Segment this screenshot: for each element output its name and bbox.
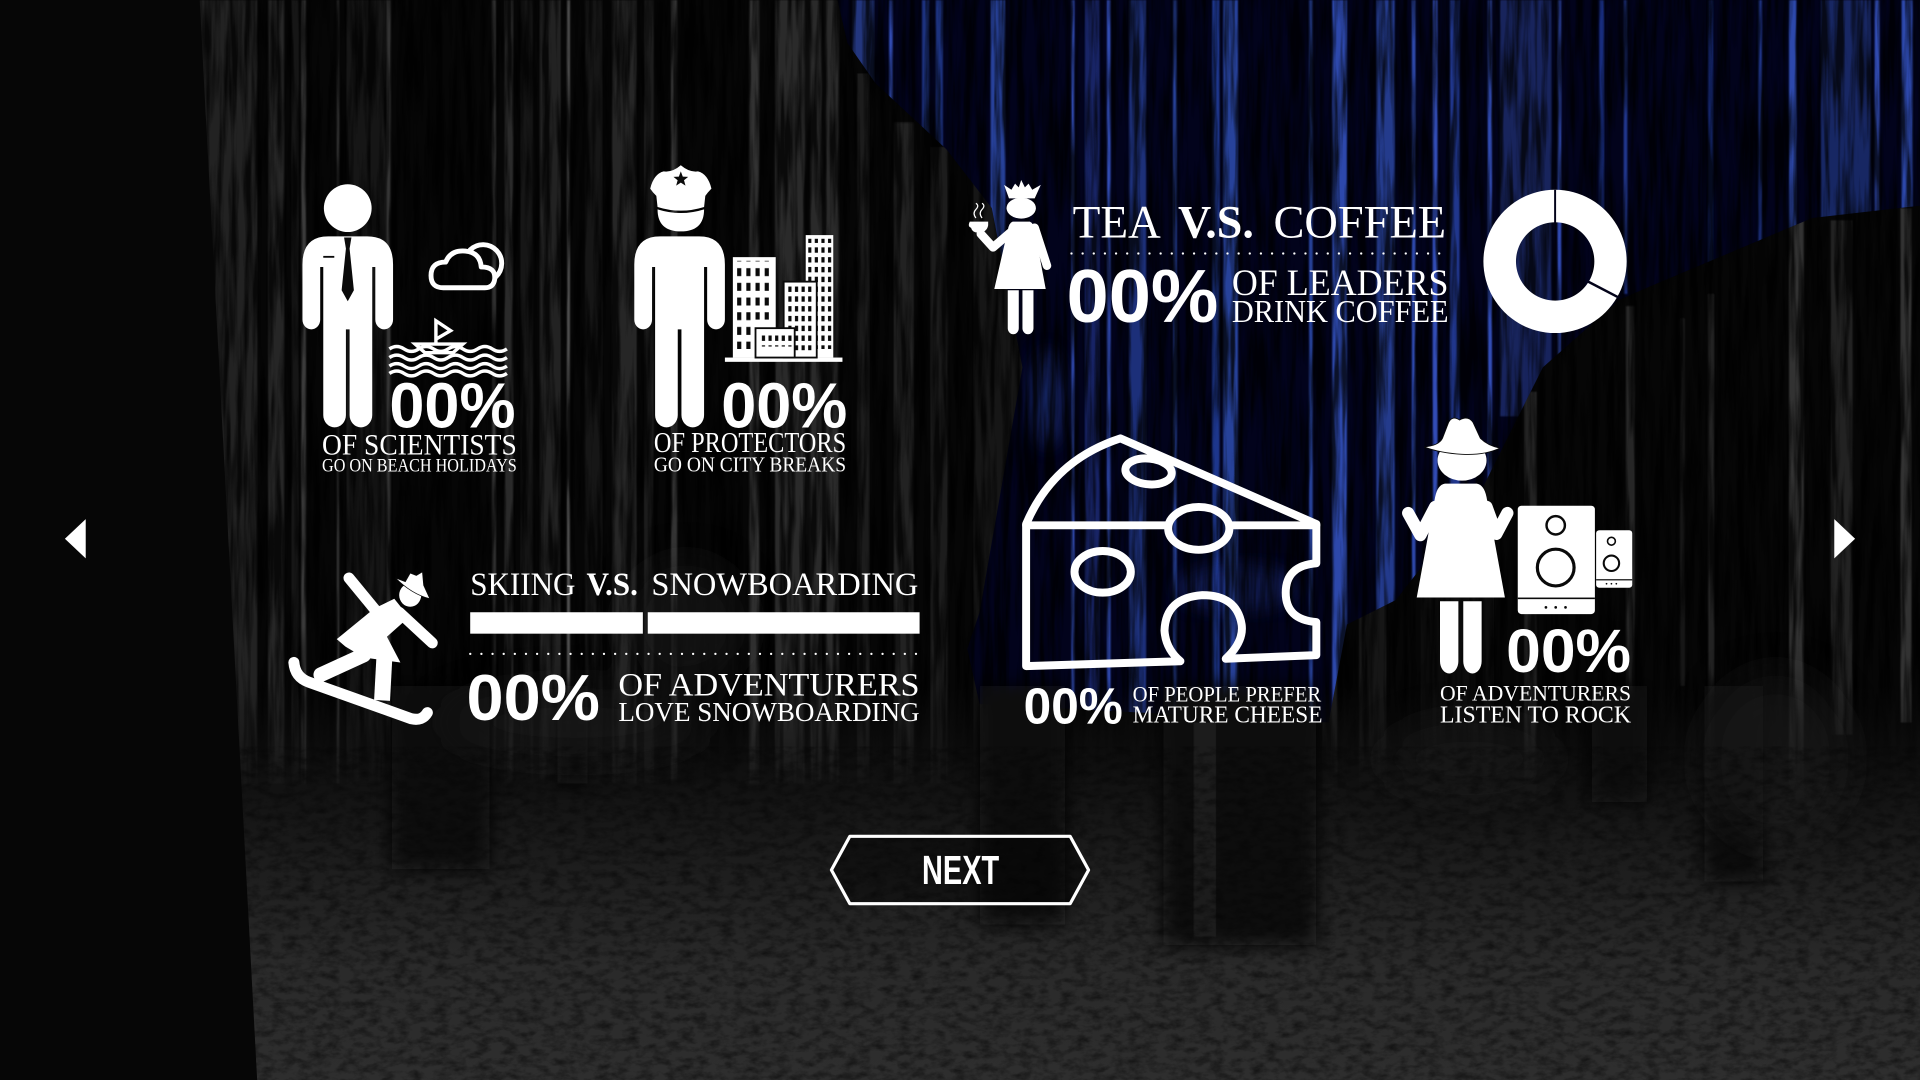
text: go on beach holidays: GO ON BEACH HOLIDAYS	[322, 455, 517, 476]
icon: speakers	[1518, 506, 1632, 614]
stat: 00% adventurers snowboarding: 00%	[467, 661, 600, 734]
donut chart	[1483, 190, 1627, 333]
text: of scientists: OF SCIENTISTS	[322, 429, 517, 461]
icon: city buildings	[725, 235, 842, 362]
text: drink coffee: DRINK COFFEE	[1232, 294, 1449, 329]
right arrow	[1834, 519, 1855, 558]
text: of people prefer: OF PEOPLE PREFER	[1133, 682, 1322, 707]
stat: 00% cheese: 00%	[1024, 677, 1123, 735]
heading: tea v.s. coffee: COFFEE	[1273, 198, 1446, 249]
icon: queen with tea cup	[969, 180, 1047, 334]
next button	[831, 836, 1089, 904]
stat: 00% scientists: 00%	[389, 370, 516, 441]
heading: skiing v.s. snowboarding: SKIING	[470, 567, 576, 603]
heading: tea v.s. coffee	[1073, 198, 1446, 249]
panel: scientists beach holidays	[302, 184, 517, 476]
icon: cheese wedge	[1026, 438, 1316, 666]
stat: 00% leaders: 00%	[1067, 254, 1218, 338]
text: of leaders: OF LEADERS	[1232, 262, 1449, 303]
icon: police officer figure	[634, 165, 725, 427]
next button: NEXT	[922, 847, 999, 893]
panel: mature cheese	[1024, 438, 1322, 735]
dotted rule	[470, 653, 920, 655]
icon: cloud and sun	[431, 245, 502, 288]
panel: tea vs coffee	[969, 180, 1627, 338]
bar chart: skiing vs snowboarding	[470, 612, 920, 634]
heading: tea v.s. coffee: TEA	[1073, 198, 1161, 249]
text: of protectors: OF PROTECTORS	[654, 428, 846, 459]
icon: snowboarder	[294, 572, 432, 719]
stat: 00% adventurers rock: 00%	[1506, 617, 1631, 685]
icon: boat on waves	[389, 321, 507, 376]
floor	[0, 686, 1920, 1080]
text: listen to rock: LISTEN TO ROCK	[1440, 701, 1631, 728]
heading: skiing v.s. snowboarding: SNOWBOARDING	[651, 567, 918, 603]
icon: scientist figure	[302, 184, 393, 427]
blue area	[840, 0, 1920, 722]
left trunk	[0, 0, 257, 1080]
foliage	[441, 563, 1849, 845]
text: of adventurers: OF ADVENTURERS	[618, 668, 920, 704]
stat: 00% protectors: 00%	[721, 370, 847, 441]
heading: skiing v.s. snowboarding: V.S.	[587, 567, 638, 603]
panel: adventurers rock	[1408, 418, 1632, 728]
icon: woman in hat	[1408, 418, 1507, 673]
heading: skiing v.s. snowboarding	[470, 567, 918, 603]
panel: protectors city breaks	[634, 165, 847, 476]
dotted rule	[1071, 252, 1447, 254]
text: mature cheese: MATURE CHEESE	[1133, 701, 1322, 728]
heading: tea v.s. coffee: V.S.	[1178, 198, 1254, 249]
text: go on city breaks: GO ON CITY BREAKS	[654, 452, 846, 476]
text: of adventurers: OF ADVENTURERS	[1440, 680, 1631, 705]
left arrow	[65, 519, 86, 558]
text: love snowboarding: LOVE SNOWBOARDING	[618, 697, 920, 727]
panel: skiing vs snowboarding	[294, 567, 920, 734]
